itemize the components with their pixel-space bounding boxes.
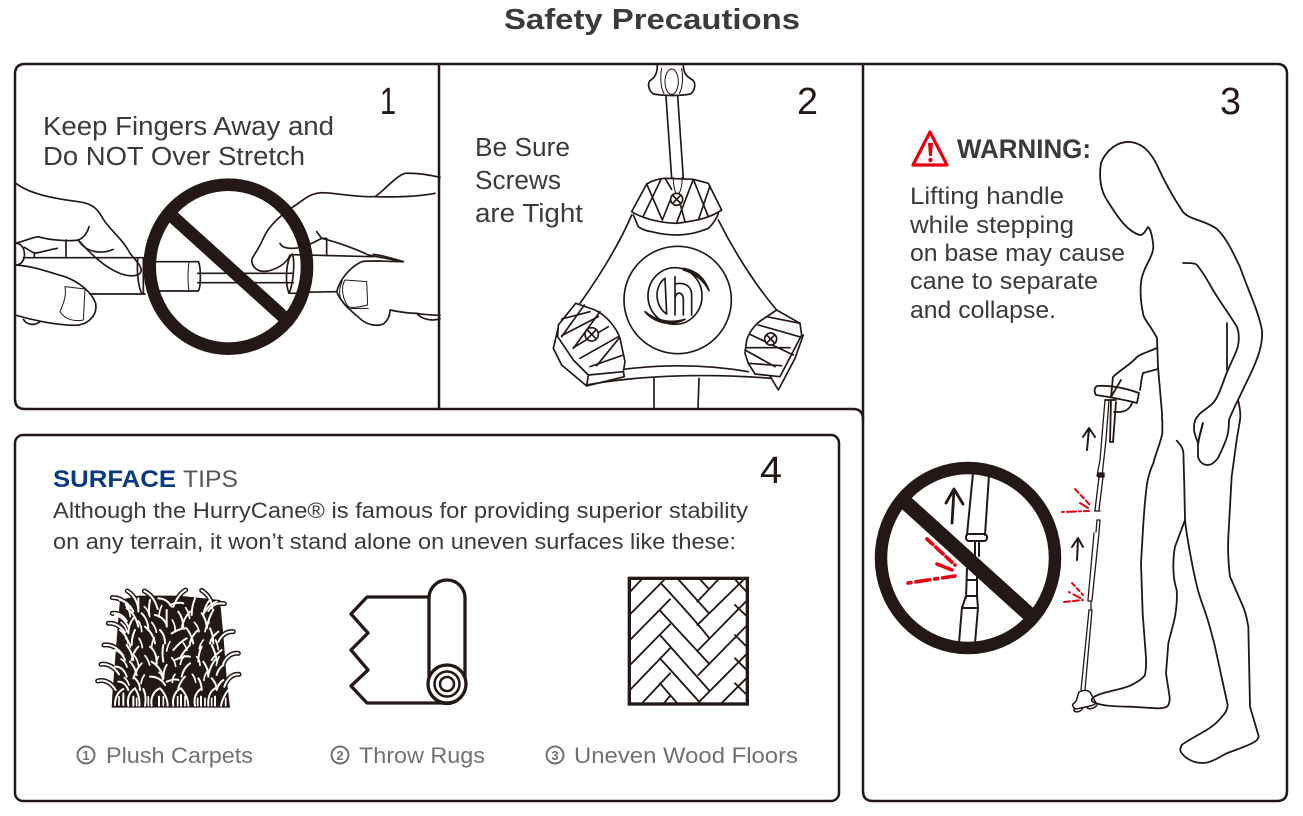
illustration: hands stretching cane <box>15 173 440 349</box>
illustration: cane base and screwdriver <box>553 65 803 408</box>
label: uneven wood floors: Uneven Wood Floors <box>574 743 798 768</box>
prohibition sign <box>150 185 307 349</box>
warning text: while stepping <box>909 212 1074 239</box>
icon: right foot pad <box>745 310 803 390</box>
label: uneven wood floors: 3 <box>551 748 559 763</box>
panel 2 instruction text: are Tight <box>475 200 583 228</box>
icon: cane with separating segments <box>1073 400 1109 712</box>
icon: HurryCane logo <box>645 268 709 324</box>
icon: uneven wood floor <box>629 578 747 705</box>
icon: plush carpet <box>98 590 239 708</box>
warning text: cane to separate <box>910 268 1098 295</box>
panel 1 number: 1 <box>380 81 396 123</box>
surface tips heading <box>53 466 238 493</box>
legs <box>1092 420 1259 763</box>
panel 1 instruction text: Do NOT Over Stretch <box>43 143 305 171</box>
prohibition sign with cane detail <box>881 468 1055 648</box>
title: Safety Precautions <box>504 4 800 36</box>
panel 4: surface tips <box>15 435 839 801</box>
arrows: lift direction <box>1072 428 1095 560</box>
surface tips description <box>53 498 748 554</box>
label: plush carpets: Plush Carpets <box>106 743 253 768</box>
panel 1: keep fingers away <box>15 64 440 409</box>
icon: screwdriver <box>649 65 695 197</box>
surface tips description: on any terrain, it won’t stand alone on uneven surfaces like these: <box>53 529 736 554</box>
red break marks on cane <box>1062 489 1090 602</box>
warning heading: WARNING: <box>957 134 1091 164</box>
panel 4 number: 4 <box>760 450 782 492</box>
panel 1 instruction text: Keep Fingers Away and <box>43 113 334 141</box>
panel 2: screws tight <box>439 64 863 419</box>
panel 1 instruction text <box>43 113 334 171</box>
label: plush carpets: 1 <box>82 748 90 763</box>
label: throw rugs: Throw Rugs <box>359 743 485 768</box>
surface tips description: Although the HurryCane® is famous for providing superior stability <box>53 498 748 523</box>
panel 2 instruction text: Screws <box>475 167 561 195</box>
detail arrow <box>946 489 963 523</box>
surface tips heading: SURFACE <box>53 466 176 493</box>
surface tips heading: TIPS <box>183 466 238 493</box>
icon: top foot pad <box>632 178 722 235</box>
panel 3 number: 3 <box>1220 81 1241 123</box>
panel 2 number: 2 <box>797 81 818 123</box>
red break marks detail <box>908 539 955 583</box>
base body <box>580 215 777 408</box>
cane detail <box>959 473 989 643</box>
warning text <box>909 183 1125 324</box>
icon: left foot pad <box>553 303 625 386</box>
label: throw rugs: 2 <box>336 748 344 763</box>
warning text: and collapse. <box>910 297 1056 324</box>
panel 3: warning <box>863 64 1287 801</box>
warning text: on base may cause <box>910 240 1125 267</box>
prohibition ring and slash <box>881 468 1055 648</box>
panel 2 instruction text: Be Sure <box>475 134 570 162</box>
panel 2 instruction text <box>475 134 583 228</box>
illustration: person lifting cane <box>1092 142 1262 763</box>
icon: warning triangle <box>913 132 947 165</box>
upper body <box>1095 142 1262 465</box>
icon: throw rug <box>351 580 466 704</box>
warning text: Lifting handle <box>910 183 1064 210</box>
